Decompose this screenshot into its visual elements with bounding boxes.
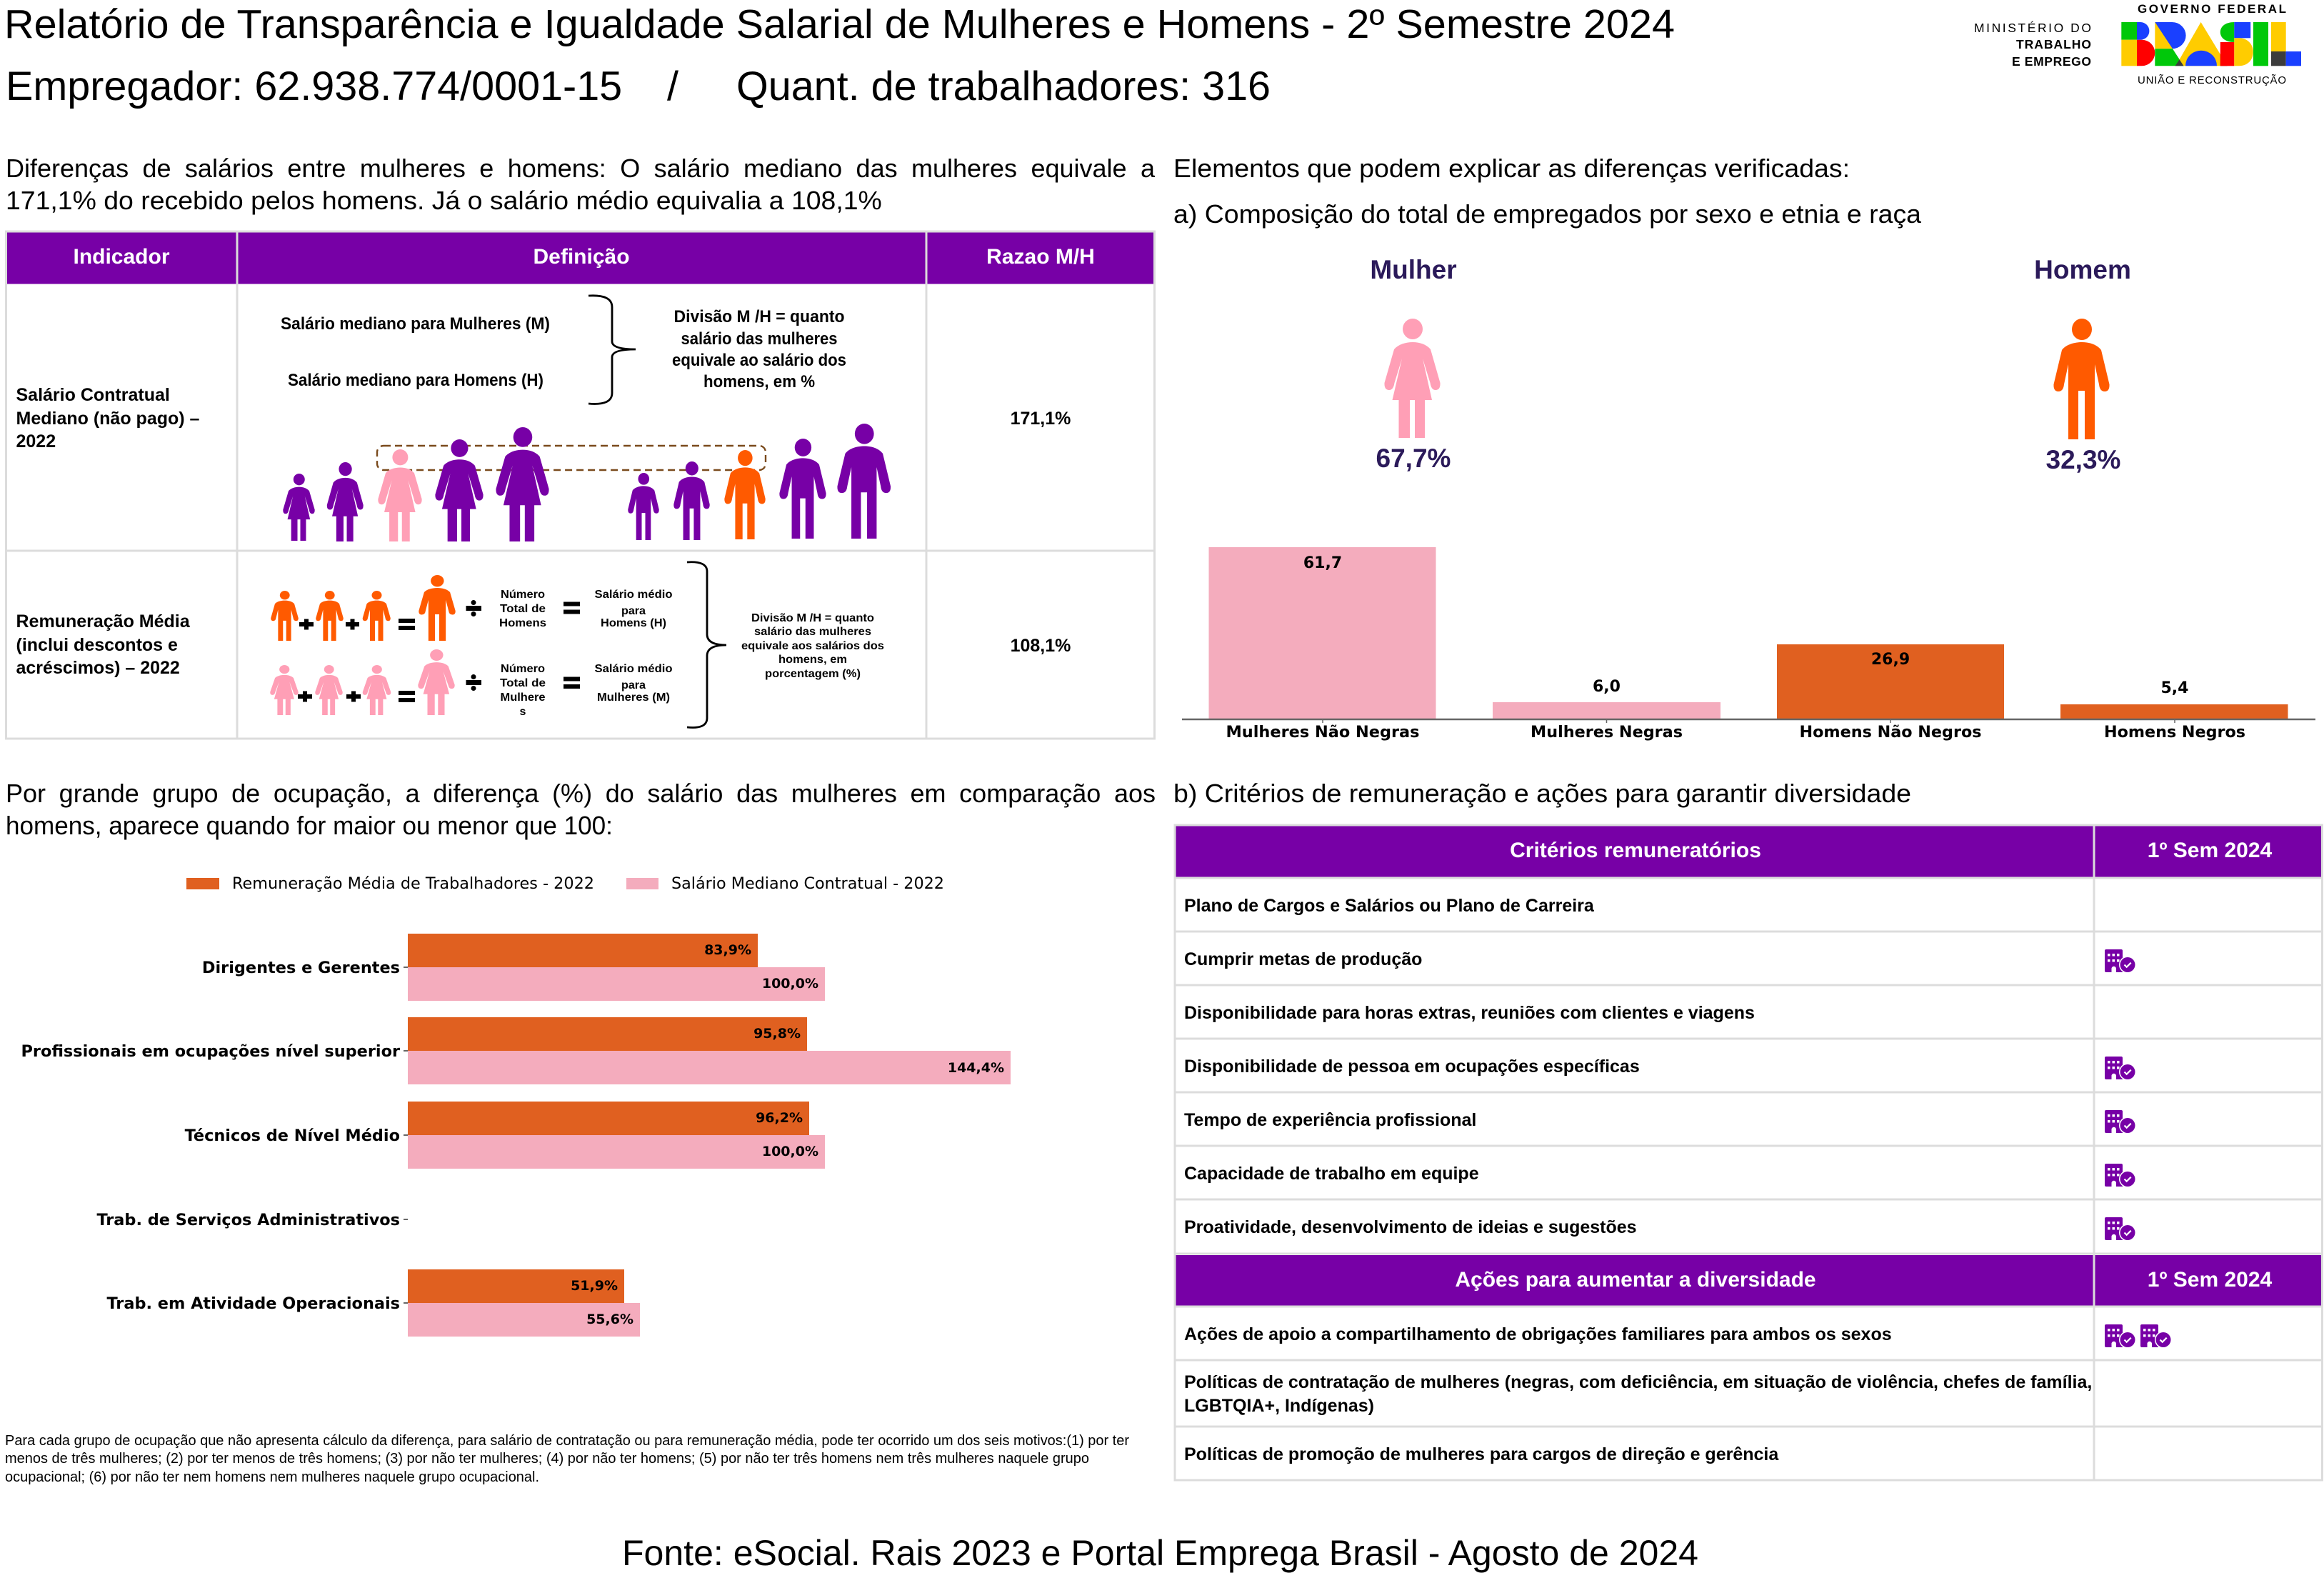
header: ações bbox=[1176, 1255, 2321, 1306]
icons: company check bbox=[2105, 949, 2172, 1349]
text block: salary differences: 171,1% do recebido pelos homens. Já o salário médio equivalia a 108,1% bbox=[6, 186, 882, 215]
employer line: / bbox=[667, 64, 678, 109]
brace bbox=[588, 296, 636, 404]
table header: Definição bbox=[533, 245, 630, 269]
ministry text bbox=[1974, 21, 2091, 69]
bar chart: sex and race: 61,7 bbox=[1303, 554, 1342, 572]
bar chart: occupation groups: 51,9% bbox=[571, 1278, 618, 1294]
bar chart: occupation groups: 95,8% bbox=[753, 1026, 801, 1042]
panel: woman share bbox=[1370, 255, 1457, 473]
table header bbox=[7, 233, 1153, 284]
women formula bbox=[270, 649, 673, 718]
title: Relatório de Transparência e Igualdade Salarial de Mulheres e Homens - 2º Semestre 2024 bbox=[4, 1, 1675, 47]
definition: median salary: Salário mediano para Homens (H) bbox=[288, 371, 544, 390]
bar chart: occupation groups: 96,2% bbox=[756, 1110, 803, 1126]
women formula: Mulheres (M) bbox=[597, 691, 670, 704]
men formula: Número bbox=[501, 589, 545, 601]
men formula bbox=[271, 575, 673, 641]
men formula: para bbox=[621, 605, 646, 617]
figures: women and men by size bbox=[283, 424, 891, 541]
bar chart: occupation groups bbox=[21, 934, 1011, 1337]
bar chart: sex and race: Mulheres Negras bbox=[1531, 724, 1683, 741]
definition: median salary: equivale ao salário dos bbox=[672, 351, 846, 370]
panel: woman share: 67,7% bbox=[1376, 444, 1451, 473]
panel: man share bbox=[2034, 255, 2131, 474]
row labels: Cumprir metas de produção bbox=[1184, 949, 1422, 969]
panel: indicator table bbox=[6, 231, 1154, 739]
panel: criteria table bbox=[1175, 825, 2323, 1480]
division note: equivale aos salários dos bbox=[741, 640, 884, 652]
bar chart: sex and race: Homens Negros bbox=[2104, 724, 2245, 741]
header: critérios: Critérios remuneratórios bbox=[1510, 839, 1761, 862]
row label: remuneração média: Remuneração Média bbox=[16, 611, 191, 631]
bar chart: occupation groups: 144,4% bbox=[948, 1060, 1004, 1076]
row labels: Plano de Cargos e Salários ou Plano de Carreira bbox=[1184, 896, 1595, 916]
row label: remuneração média: acréscimos) – 2022 bbox=[16, 658, 180, 678]
definition: median salary: homens, em % bbox=[703, 372, 815, 391]
women formula: Total de bbox=[500, 677, 546, 689]
footnote bbox=[5, 1432, 1129, 1485]
definition: median salary: Divisão M /H = quanto bbox=[674, 307, 844, 326]
panel: man share: Homem bbox=[2034, 255, 2131, 284]
row labels: Disponibilidade para horas extras, reuniões com clientes e viagens bbox=[1184, 1003, 1755, 1023]
bar chart: occupation groups: Técnicos de Nível Médio bbox=[185, 1127, 400, 1145]
bar chart: occupation groups: Trab. de Serviços Administrativos bbox=[96, 1211, 400, 1229]
women formula: para bbox=[621, 679, 646, 691]
row labels: LGBTQIA+, Indígenas) bbox=[1184, 1396, 1374, 1416]
women formula: Número bbox=[501, 663, 545, 675]
value: 108,1%: 108,1% bbox=[1011, 636, 1071, 656]
row label: salário contratual: Mediano (não pago) – bbox=[16, 409, 200, 429]
table header: Indicador bbox=[73, 245, 170, 269]
division note bbox=[741, 612, 884, 680]
women formula: s bbox=[520, 706, 526, 718]
brace bbox=[687, 562, 726, 727]
footnote: ocupacional; (6) por não ter nem homens nem mulheres naquele grupo ocupacional. bbox=[5, 1469, 539, 1485]
text block: occupation intro bbox=[6, 779, 1156, 840]
text block: occupation intro: homens, aparece quando for maior ou menor que 100: bbox=[6, 811, 613, 840]
division note: salário das mulheres bbox=[754, 626, 871, 638]
footnote: Para cada grupo de ocupação que não apresenta cálculo da diferença, para salário de contratação ou para remuneração média, pode ter ocorrido um dos seis motivos:(1) por ter bbox=[5, 1432, 1129, 1449]
bar chart: occupation groups: Trab. em Atividade Operacionais bbox=[106, 1294, 400, 1313]
bar chart: occupation groups: 83,9% bbox=[704, 942, 751, 958]
men formula: Homens (H) bbox=[601, 617, 666, 629]
bar chart: sex and race: Homens Não Negros bbox=[1800, 724, 1981, 741]
heading: composição: a) Composição do total de empregados por sexo e etnia e raça bbox=[1173, 199, 1922, 229]
employer line: Quant. de trabalhadores: 316 bbox=[736, 64, 1271, 109]
bar chart: sex and race: 6,0 bbox=[1593, 678, 1621, 696]
definition: average pay bbox=[270, 562, 884, 727]
bar chart: sex and race: Mulheres Não Negras bbox=[1226, 724, 1420, 741]
definition: median salary: salário das mulheres bbox=[681, 329, 837, 349]
logo mark: Brasil bbox=[2121, 22, 2301, 66]
header: critérios: 1º Sem 2024 bbox=[2148, 839, 2273, 862]
legend: Remuneração Média de Trabalhadores - 2022 bbox=[232, 875, 594, 893]
header: ações: Ações para aumentar a diversidade bbox=[1455, 1268, 1816, 1292]
panel: woman share: Mulher bbox=[1370, 255, 1457, 284]
bar chart: sex and race: 5,4 bbox=[2161, 679, 2188, 697]
bar chart: occupation groups: 55,6% bbox=[586, 1312, 633, 1327]
men formula: Salário médio bbox=[594, 589, 673, 601]
division note: homens, em bbox=[778, 654, 847, 666]
logo subheading: UNIÃO E RECONSTRUÇÃO bbox=[2138, 74, 2286, 86]
row label: salário contratual: Salário Contratual bbox=[16, 385, 170, 405]
footnote: menos de três mulheres; (2) por ter menos de três homens; (3) por não ter mulheres; (4) por não ter homens; (5) por não ter três homens nem três mulheres naquele grupo bbox=[5, 1450, 1089, 1467]
row labels: Tempo de experiência profissional bbox=[1184, 1110, 1476, 1130]
definition: median salary: Salário mediano para Mulheres (M) bbox=[281, 314, 550, 334]
row labels: Proatividade, desenvolvimento de ideias e sugestões bbox=[1184, 1217, 1637, 1237]
employer line: Empregador: 62.938.774/0001-15 bbox=[6, 64, 622, 109]
ministry text: E EMPREGO bbox=[2012, 54, 2091, 69]
text block: salary differences bbox=[6, 154, 1156, 215]
row labels: Capacidade de trabalho em equipe bbox=[1184, 1164, 1479, 1184]
icon: man bbox=[2053, 319, 2110, 439]
men formula: Total de bbox=[500, 603, 546, 615]
heading: elementos: Elementos que podem explicar as diferenças verificadas: bbox=[1173, 154, 1850, 183]
legend bbox=[186, 875, 944, 893]
logo: government bbox=[1974, 2, 2301, 86]
men formula: Homens bbox=[499, 617, 546, 629]
row labels: Ações de apoio a compartilhamento de obrigações familiares para ambos os sexos bbox=[1184, 1324, 1892, 1344]
bar chart: occupation groups: Dirigentes e Gerentes bbox=[202, 959, 400, 977]
definition: median salary bbox=[281, 296, 846, 404]
ministry text: TRABALHO bbox=[2016, 37, 2091, 51]
table header: Razao M/H bbox=[986, 245, 1095, 269]
heading: critérios: b) Critérios de remuneração e ações para garantir diversidade bbox=[1173, 779, 1911, 808]
row labels: Políticas de contratação de mulheres (negras, com deficiência, em situação de violência, chefes de família, bbox=[1184, 1372, 2092, 1392]
ministry text: MINISTÉRIO DO bbox=[1974, 21, 2091, 35]
legend: Salário Mediano Contratual - 2022 bbox=[671, 875, 944, 893]
division note: Divisão M /H = quanto bbox=[751, 612, 874, 624]
bar chart: occupation groups: 100,0% bbox=[762, 1144, 818, 1159]
women formula: Salário médio bbox=[594, 663, 673, 675]
header: ações: 1º Sem 2024 bbox=[2148, 1268, 2273, 1292]
panel: man share: 32,3% bbox=[2046, 445, 2120, 474]
row label: remuneração média: (inclui descontos e bbox=[16, 635, 178, 655]
text block: occupation intro: Por grande grupo de ocupação, a diferença (%) do salário das mulheres em comparação aos bbox=[6, 779, 1156, 808]
row label: salário contratual: 2022 bbox=[16, 431, 56, 451]
bar chart: sex and race: 26,9 bbox=[1871, 651, 1910, 669]
division note: porcentagem (%) bbox=[765, 668, 861, 680]
header: critérios bbox=[1176, 826, 2321, 877]
row labels: Políticas de promoção de mulheres para cargos de direção e gerência bbox=[1184, 1444, 1779, 1464]
bar chart: occupation groups: 100,0% bbox=[762, 976, 818, 992]
bar chart: sex and race bbox=[1182, 547, 2315, 741]
source: Fonte: eSocial. Rais 2023 e Portal Emprega Brasil - Agosto de 2024 bbox=[622, 1533, 1698, 1573]
text block: salary differences: Diferenças de salários entre mulheres e homens: O salário mediano das mulheres equivale a bbox=[6, 154, 1155, 183]
row labels bbox=[1184, 896, 2092, 1464]
bar chart: occupation groups: Profissionais em ocupações nível superior bbox=[21, 1042, 400, 1061]
icon: woman bbox=[1384, 319, 1441, 438]
row labels: Disponibilidade de pessoa em ocupações específicas bbox=[1184, 1057, 1640, 1077]
value: 171,1%: 171,1% bbox=[1011, 409, 1071, 429]
logo heading: GOVERNO FEDERAL bbox=[2138, 2, 2286, 16]
women formula: Mulhere bbox=[500, 691, 546, 704]
